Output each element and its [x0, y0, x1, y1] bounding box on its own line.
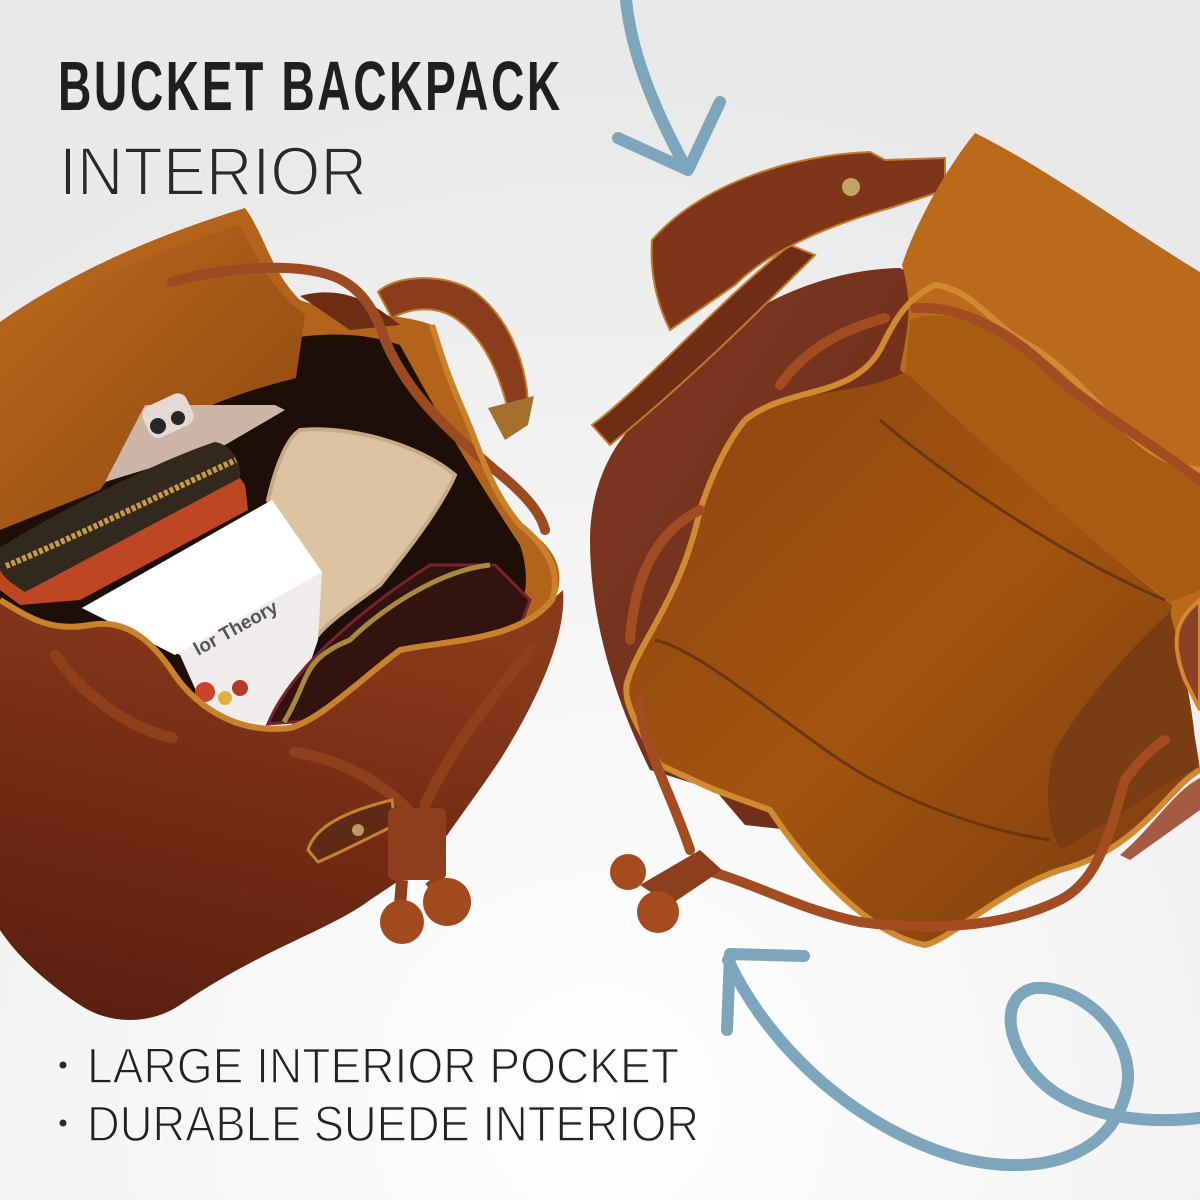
book floral art [195, 680, 248, 705]
top strap [652, 152, 945, 330]
back strap loop [378, 278, 528, 410]
back leather rim [300, 292, 400, 330]
bullet: large interior pocket: LARGE INTERIOR POCKET [87, 1038, 679, 1094]
cord stopper and knots [380, 808, 471, 944]
interior floor crease [655, 420, 1165, 840]
title [58, 46, 560, 210]
interior floor and wall [626, 372, 1200, 945]
outer leather body [590, 268, 945, 830]
brass buckle [488, 396, 534, 440]
front drawcord [55, 650, 530, 812]
interior side pocket [1048, 612, 1197, 850]
suede rim [626, 285, 1200, 945]
bullet list [60, 1038, 699, 1152]
bullet dot one [60, 1062, 66, 1068]
hanging strap [592, 245, 815, 445]
pink outer sliver [1120, 778, 1200, 860]
drawcord [630, 308, 1200, 927]
suede back flap [900, 133, 1200, 640]
right edge leather [1177, 600, 1200, 710]
pouch zipper [284, 565, 490, 722]
burgundy pouch [268, 565, 530, 724]
cord knots [610, 850, 722, 933]
suede pocket upper panel [0, 225, 305, 530]
heading: bucket backpack: BUCKET BACKPACK [58, 46, 560, 125]
suede interior wall [0, 208, 559, 725]
arrow: top, pointing down to right bag [618, 0, 720, 170]
front leather body [0, 590, 563, 1020]
bullet dot two [60, 1120, 66, 1126]
brass rivet tab [308, 800, 395, 862]
phone [105, 390, 285, 482]
brass rivet [842, 178, 860, 196]
arrow: bottom, looping up to right bag [727, 954, 1200, 1165]
book [82, 500, 322, 722]
bullet: durable suede interior: DURABLE SUEDE INTERIOR [87, 1096, 699, 1152]
right bag: empty backpack showing suede [590, 133, 1200, 945]
book title: lor Theory [190, 597, 282, 660]
suede rim edge [0, 325, 555, 729]
dark interior shadow [0, 334, 526, 725]
heading: interior: INTERIOR [59, 133, 367, 210]
red zip wallet [0, 442, 248, 605]
left bag: open backpack with contents [0, 208, 563, 1020]
beige pouch [268, 429, 455, 635]
flap shaded panel [905, 315, 1200, 602]
drawcord back [172, 268, 545, 530]
